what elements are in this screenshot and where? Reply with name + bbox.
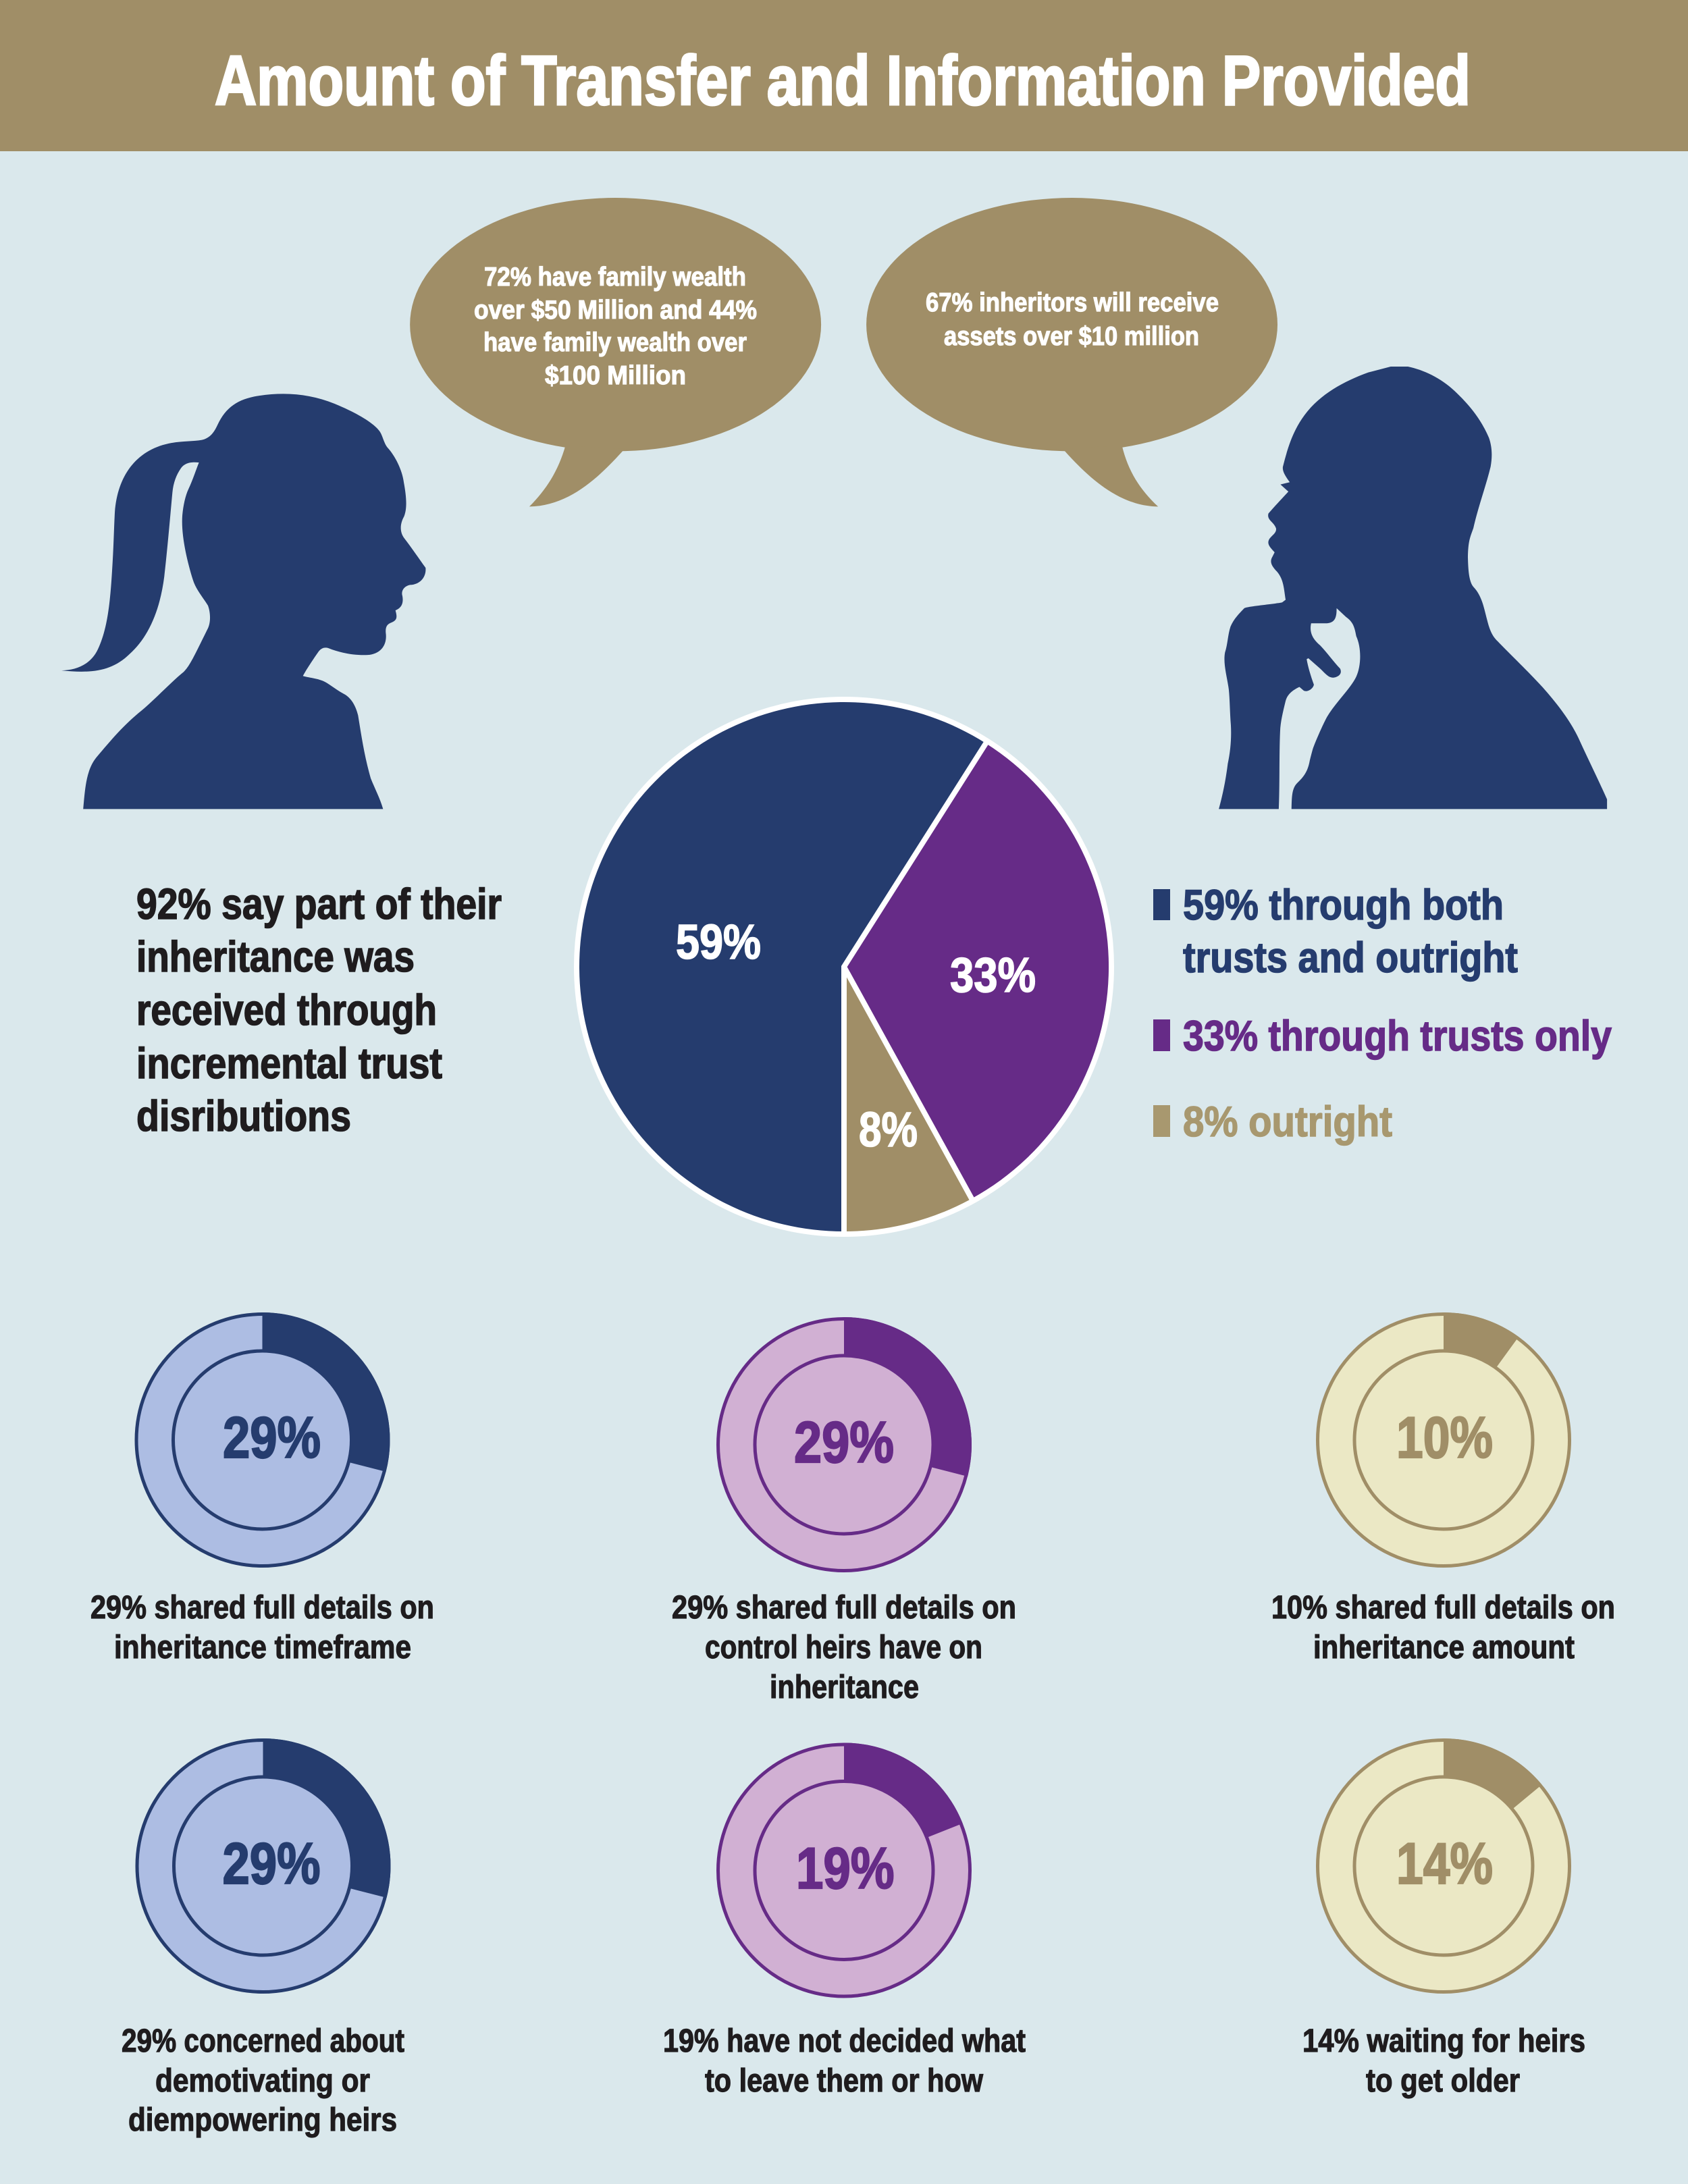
donut: 14% waiting for heirs <box>1318 1738 1569 1992</box>
slice: 59% <box>579 702 986 1231</box>
speech bubble: family wealth: $100 Million <box>545 361 686 390</box>
slice: 8% <box>844 967 972 1231</box>
speech bubble: family wealth: over $50 Million and 44% <box>474 296 757 325</box>
legend item: 59%: 59% through both <box>1183 882 1504 929</box>
donut: 10% inheritance amount <box>1318 1312 1569 1566</box>
donut: 10% inheritance amount: 10% <box>1396 1406 1493 1470</box>
speech bubble: family wealth: 72% have family wealth <box>484 263 746 292</box>
legend item: 59% <box>1153 882 1518 982</box>
title: Amount of Transfer and Information Provided <box>215 42 1471 120</box>
speech bubble: inheritor assets: 67% inheritors will receive <box>926 288 1219 317</box>
pie chart <box>574 697 1114 1237</box>
donut: 29% control heirs have: 29% <box>794 1410 894 1475</box>
caption: demotivating heirs <box>122 2023 404 2138</box>
caption: not decided: 19% have not decided what <box>663 2023 1026 2059</box>
donut: 29% inheritance timeframe: 29% <box>223 1406 321 1470</box>
text block: incremental trust distributions: received through <box>136 986 437 1034</box>
caption: control heirs have: inheritance <box>770 1670 919 1705</box>
text block: incremental trust distributions: disributions <box>136 1092 351 1140</box>
text block: incremental trust distributions: 92% say part of their <box>136 880 502 928</box>
legend item: 59%: trusts and outright <box>1183 934 1518 982</box>
donut: 29% demotivating heirs: 29% <box>223 1832 320 1896</box>
donut: 19% not decided: 19% <box>796 1836 894 1901</box>
caption: inheritance amount: inheritance amount <box>1313 1630 1575 1666</box>
speech bubble: inheritor assets <box>866 198 1277 506</box>
icon: woman silhouette <box>61 394 425 809</box>
caption: control heirs have: 29% shared full details on <box>672 1590 1016 1626</box>
caption: demotivating heirs: diempowering heirs <box>128 2102 397 2138</box>
donut: 29% demotivating heirs <box>137 1738 390 1992</box>
legend item: 33%: 33% through trusts only <box>1183 1013 1612 1060</box>
donut: 14% waiting for heirs: 14% <box>1396 1832 1493 1896</box>
caption: waiting for heirs <box>1302 2023 1585 2099</box>
caption: waiting for heirs: to get older <box>1366 2063 1520 2099</box>
text block: incremental trust distributions: incremental trust <box>136 1039 442 1088</box>
donut: 29% inheritance timeframe <box>136 1312 390 1566</box>
caption: not decided <box>663 2023 1026 2099</box>
caption: not decided: to leave them or how <box>705 2063 984 2099</box>
donut: 29% control heirs have <box>718 1317 972 1570</box>
icon: man silhouette <box>1219 367 1607 809</box>
caption: inheritance amount: 10% shared full details on <box>1271 1590 1615 1626</box>
caption: demotivating heirs: demotivating or <box>155 2063 370 2099</box>
slice: 33% <box>844 743 1109 1199</box>
caption: control heirs have: control heirs have on <box>705 1630 982 1666</box>
caption: waiting for heirs: 14% waiting for heirs <box>1302 2023 1585 2059</box>
caption: control heirs have <box>672 1590 1016 1705</box>
speech bubble: inheritor assets: assets over $10 million <box>944 322 1199 351</box>
speech bubble: family wealth: have family wealth over <box>483 328 747 357</box>
text block: incremental trust distributions: inheritance was <box>136 932 415 981</box>
caption: inheritance timeframe <box>90 1590 434 1666</box>
pie label: 59%: 59% <box>676 915 761 969</box>
title banner <box>0 0 1688 151</box>
pie label: 8%: 8% <box>859 1103 918 1157</box>
caption: demotivating heirs: 29% concerned about <box>122 2023 404 2059</box>
text block: incremental trust distributions <box>136 880 502 1140</box>
caption: inheritance timeframe: inheritance timeframe <box>114 1630 411 1666</box>
legend <box>1153 882 1612 1146</box>
pie label: 33%: 33% <box>950 949 1036 1003</box>
legend item: 8%: 8% outright <box>1183 1098 1392 1146</box>
caption: inheritance timeframe: 29% shared full details on <box>90 1590 434 1626</box>
speech bubble: family wealth <box>410 198 821 506</box>
caption: inheritance amount <box>1271 1590 1615 1666</box>
donut: 19% not decided <box>718 1743 970 1996</box>
